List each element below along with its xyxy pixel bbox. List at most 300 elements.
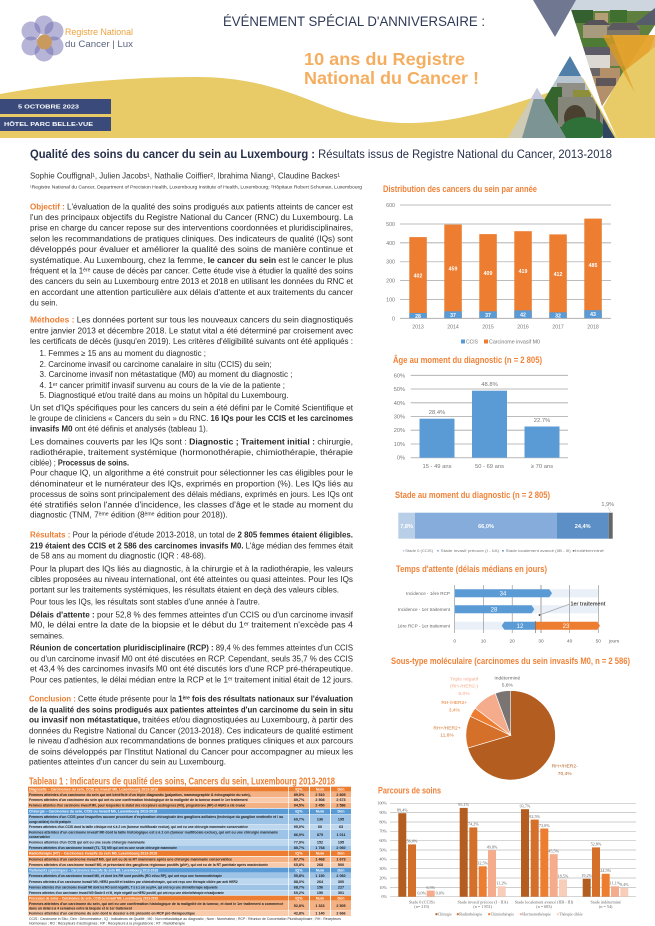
chart: distribution par année: 100 [386, 297, 395, 303]
pie labels: 9,0% [458, 691, 470, 697]
section: processus de soins: Num [316, 896, 325, 900]
section: processus de soins: 42,8% [294, 912, 305, 916]
results text: Délais d'attente : pour 52,8 % des femmes atteintes d'un CCIS ou d'un carcinome invasif [30, 611, 354, 620]
results text: Pour ces patientes, le délai médian entre la RCP et le 1 [30, 676, 226, 685]
table footnote [29, 916, 341, 925]
chart: distribution par année: 32 [555, 314, 561, 320]
chart: âge au diagnostic: 50 - 69 ans [475, 464, 504, 470]
gold triangle [602, 35, 655, 93]
section: chirurgie: Num [316, 810, 325, 814]
group labels: (n = 1 851) [473, 904, 493, 909]
chart: âge au diagnostic: 10% [394, 442, 405, 448]
group labels: Stade invasif précoce (I - IIA) [458, 899, 508, 904]
chart: âge au diagnostic: 60% [394, 373, 405, 379]
group: stade invasif précoce: 11,2% [496, 880, 508, 886]
poster title: Qualité des soins du cancer du sein au Luxembourg : Résultats issus de Registre National du Cancer, 2013-2018 [30, 148, 612, 161]
methods text [30, 316, 354, 520]
section: chirurgie [28, 809, 351, 850]
chart: distribution par année: 2017 [552, 325, 564, 331]
duration bars [455, 589, 600, 633]
section: traitements systémiques: 227 [338, 886, 344, 890]
chart: parcours de soins: 0% [381, 894, 388, 899]
section: processus de soins: 2 666 [336, 912, 346, 916]
event title [304, 49, 479, 88]
section: chirurgie: Femmes atteintes d'un CCIS pour lesquelles aucune procédure d'exploration chirurgicale des ganglions axillaires (technique du ganglion sentinelle et / ou [29, 815, 284, 819]
section: traitements systémiques: 60,2% [294, 891, 305, 895]
axis labels: 40 [567, 638, 573, 644]
section: traitements systémiques: 150 [317, 891, 323, 895]
section: traitements systémiques: 88,0% [294, 880, 305, 884]
group: stade invasif précoce: 95,1% [458, 802, 470, 808]
duration bars: 23 [563, 624, 570, 630]
eligibility list: 2. Carcinome invasif ou carcinome canalaire in situ (CCIS) du sein; [40, 360, 272, 369]
photo triangle: bridge [544, 56, 615, 138]
section: processus de soins: Dén [338, 896, 345, 900]
chart: âge au diagnostic: ≥ 70 ans [531, 464, 553, 470]
results text: portant sur les traitements systémiques, les résultats étaient en deçà des valeurs cibles. [30, 586, 339, 595]
section: processus de soins [28, 896, 351, 916]
chart title: Parcours de soins [378, 784, 441, 795]
group labels [409, 899, 621, 909]
authors: Sophie Couffignal¹, Julien Jacobs¹, Nathalie Coiffier², Ibrahima Niang¹, Claudine Backes¹ [30, 172, 340, 181]
callout 1,9% [601, 502, 614, 512]
section: traitements systémiques: IQ% [295, 868, 303, 872]
conclusion text: de la qualité des soins prodigués aux patientes atteintes d'un carcinome du sein in situ [29, 706, 353, 715]
group: stade localement avancé [520, 804, 569, 897]
pie labels: 5,6% [502, 683, 514, 689]
section: chirurgie: conservatrice [29, 835, 50, 839]
group labels: Stade 0 (CCIS) [409, 899, 435, 904]
results text: Pour la plupart des IQs liés au diagnostic, à la chirurgie et à la radiothérapie, les valeurs [30, 565, 353, 574]
chart: âge au diagnostic: 15 - 49 ans [422, 464, 452, 470]
objective text: l'un des principaux objectifs du Registre National du Cancer (RNC) du Luxembourg. La [30, 213, 354, 222]
legend: CCIS [466, 340, 479, 346]
chart: distribution par année: 2014 [447, 325, 459, 331]
group labels: (n = 54) [599, 904, 613, 909]
objective text: selon les recommandations de pratiques cliniques. Des indicateurs de qualité (IQs) sont [30, 234, 354, 243]
section: diagnostic: Num [316, 788, 325, 792]
results text: Réunion de concertation pluridisciplinaire (RCP) : 89,4 % des femmes atteintes d'un CCIS [30, 644, 353, 653]
pie labels: 11,6% [440, 733, 454, 739]
section: radiothérapie: 500 [338, 863, 344, 867]
stacked bars [409, 219, 602, 318]
results text: traitement n'excède pas 4 [249, 621, 354, 630]
section: traitements systémiques: Femmes atteintes d'un carcinome invasif M0, HER2 positif et traitées par chimiothérapie, qui ont reçu une thérapie ciblée par anti HER2 [29, 880, 238, 884]
methods text: ème [145, 512, 155, 518]
section: radiothérapie: 1 468 [315, 858, 325, 862]
section: processus de soins: Femmes atteintes d'un carcinome du sein dont le dossier a été présenté en RCP pré-thérapeutique [29, 912, 195, 916]
chart: âge au diagnostic: 0% [397, 456, 405, 462]
eligibility list: 5. Diagnostiqué et/ou traité dans au moins un hôpital du Luxembourg. [40, 391, 288, 400]
section: traitements systémiques: Femmes atteintes d'un carcinome invasif M0 Stade II et III, triple négatif ou HER2 positif, qui ont reçu une chimiothérapie néoadjuvante [29, 891, 224, 895]
group: stade invasif précoce: 49,8% [487, 844, 498, 850]
objective text: en accordant une attention particulière aux délais d'attente et aux traitements du cancer [30, 288, 353, 297]
legend: Stade invasif précoce (I - IIA) [441, 549, 500, 553]
chart title: Stade au moment du diagnostic (n = 2 805) [395, 489, 550, 500]
axis labels [453, 638, 620, 644]
section: radiothérapie: Radiothérapie (RT) – Carcinomes invasifs du sein M0, Luxembourg 2013-2018 [29, 852, 157, 856]
methods text: entre janvier 2013 et décembre 2018. Le statut vital a été déterminé par croisement avec [30, 326, 353, 335]
section: chirurgie: 63 [339, 825, 343, 829]
section: chirurgie: IQ% [295, 810, 303, 814]
section: radiothérapie: 1 673 [336, 858, 346, 862]
section: chirurgie: 1 768 [315, 846, 325, 850]
section: chirurgie: Dén [338, 810, 345, 814]
section: diagnostic: 2 508 [315, 798, 325, 802]
chart title: Temps d'attente (délais médians en jours) [396, 563, 547, 574]
section: chirurgie: 1 011 [336, 833, 346, 837]
eligibility list: cancer primitif invasif survenu au cours de la vie de la patiente ; [57, 381, 285, 390]
chart: distribution par année: 2016 [517, 325, 529, 331]
legend [403, 549, 604, 553]
results text: de 58 ans au moment du diagnostic (IQR : 48-68). [30, 552, 206, 561]
results text: M0, le délai entre la date de la biopsie et le début du 1 [30, 621, 222, 630]
section: traitements systémiques: Traitements systémiques – Carcinomes invasifs du sein M0, Luxembourg 2013-2018 [29, 868, 158, 872]
objective text: cause de décès par cancer. Cette étude vise à étudier la qualité des soins [90, 266, 353, 276]
legend: Chirurgie [438, 912, 452, 917]
date box [0, 99, 111, 114]
row labels: Incidence - 1er traitement [398, 607, 451, 612]
chart: âge au diagnostic: 30% [394, 414, 405, 420]
duration bars: 28 [491, 607, 498, 613]
chart: parcours de soins: 80% [379, 819, 388, 824]
chart: distribution par année: 37 [450, 313, 456, 319]
section: traitements systémiques: 264 [317, 880, 324, 884]
methods text: Pour chaque IQ, un algorithme a été construit pour sélectionner les cas éligibles pour le [30, 469, 354, 478]
section: chirurgie: 152 [317, 841, 323, 845]
methods text: dénominateur et le numérateur des IQs, exprimés en proportion (%). Les IQs liés au [30, 480, 353, 489]
section: radiothérapie: Dén [338, 852, 345, 856]
tan and gray-green triangle [508, 88, 566, 138]
chart: distribution par année: 300 [386, 260, 395, 266]
chart: distribution par année: 0 [392, 316, 395, 322]
chart: âge au diagnostic: 22.7% [534, 418, 550, 424]
group: stade localement avancé: 93,7% [520, 804, 531, 810]
chart: âge au diagnostic: 48.8% [481, 382, 498, 388]
section: processus de soins: 52,8% [294, 904, 305, 908]
table footnote: CCIS : Carcinome in Situ ; Dén : Dénominateur ; IQ : Indicateurs de Qualité ; M0 : Non métastatique au diagnostic ; Num : Numérateur ; RCP : Réunion de Concertation Pluridisciplinaire ; RH : Récepteurs [29, 916, 341, 921]
methods text: édition pour 2018)). [154, 511, 228, 520]
group: stade localement avancé: 45,5% [548, 848, 560, 854]
eligibility list: 1. Femmes ≥ 15 ans au moment du diagnostic ; [40, 349, 206, 358]
section: traitements systémiques: Femmes atteintes d'un carcinome invasif M0, et dont les RH sont positifs (RO et/ou RP), qui ont reçu une hormonothérapie [29, 874, 222, 878]
legend: Carcinome invasif M0 [489, 340, 540, 346]
legend: Stade localement avancé (IIB - III) [506, 549, 572, 553]
section: chirurgie: Chirurgie – Carcinomes du sein, CCIS ou invasif M0, Luxembourg 2013-2018 [29, 810, 157, 814]
legend [436, 912, 583, 917]
group: stade localement avancé: 82,5% [529, 814, 541, 820]
methods text: Méthodes : Les données portent sur tous les nouveaux cancers du sein diagnostiqués [30, 316, 353, 325]
section: radiothérapie: IQ% [295, 852, 303, 856]
venue box: HÔTEL PARC BELLE-VUE [4, 120, 93, 128]
affiliations: ¹Registre National du Cancer, Department of Precision Health, Luxembourg Institute of Health, Luxembourg; ²Hôpitaux Robert Schuman, Luxembourg [30, 184, 363, 190]
chart: parcours de soins: 100% [377, 801, 388, 806]
results text: ou d'un carcinome invasif M0 ont été discutées en RCP. Cependant, seuls 35,7 % des CCIS [30, 655, 353, 664]
group labels: (n= 219) [414, 904, 430, 909]
section: processus de soins: IQ% [295, 896, 303, 900]
section: chirurgie: 2 060 [336, 846, 346, 850]
chart: distribution par année: 28 [415, 314, 421, 320]
objective text: Objectif : L'évaluation de la qualité des soins prodigués aux patients atteints de cancer est [30, 202, 354, 211]
chart: distribution par année: 43 [590, 312, 596, 318]
photo triangle: old town [570, 0, 655, 106]
methods text: invasifs M0 ont été définis et analysés (tableau 1). [30, 425, 208, 434]
section: chirurgie: curage axillaire) n'a été pratiquée [29, 820, 71, 824]
section: diagnostic: 2 673 [336, 798, 346, 802]
methods text: ème [99, 512, 109, 518]
legend: Stade 0 (CCIS) [405, 549, 434, 553]
axis labels: 30 [538, 638, 544, 644]
pie labels: RH+/HER2- [552, 764, 578, 770]
conclusion text: données du Registre National du Cancer (2013-2018). Ces indicateurs de qualité estiment [29, 727, 354, 736]
methods text: les certificats de décès (jusqu'en 2019). Les critères d'éligibilité suivants ont été appliqués : [30, 337, 353, 346]
eligibility list: er [53, 382, 58, 388]
row labels: Incidence - 1ère RCP [406, 591, 450, 596]
group: stade indéterminé: 52,8% [591, 842, 602, 848]
section: traitements systémiques: 300 [338, 880, 344, 884]
chart: distribution par année [383, 183, 611, 346]
group labels: (n = 683) [536, 904, 552, 909]
chart: distribution par année: 2018 [587, 325, 599, 331]
chart: distribution par année: 500 [386, 222, 395, 228]
legend [461, 340, 540, 346]
yellow wave [0, 77, 617, 138]
group: stade 0 [397, 808, 445, 897]
gray triangle [533, 0, 576, 37]
conclusion text: ou invasif non métastatique, traitées et/ou diagnostiquées au Luxembourg, à partir des [29, 716, 353, 725]
objective text: ère [83, 268, 91, 274]
chart: parcours de soins: 50% [379, 847, 388, 852]
group: stade 0: 6,5% [426, 885, 436, 891]
objective text: fréquent et la 1 [30, 266, 83, 276]
section: diagnostic: Diagnostic – Carcinomes du sein, CCIS ou invasif M0, Luxembourg 2013-2018 [29, 788, 158, 792]
section: traitements systémiques: 1 150 [315, 874, 325, 878]
section: traitements systémiques: 55,8% [294, 874, 305, 878]
objective text: prise en charge du cancer repose sur des interventions coordonnées et pluridisciplinaires, [30, 224, 353, 233]
chart: distribution par année: 459 [449, 267, 457, 273]
conclusion text [29, 695, 354, 767]
section: radiothérapie [28, 851, 351, 867]
results text: 219 étaient des CCIS et 2 586 des carcinomes invasifs M0. L'âge médian des femmes était [30, 542, 354, 551]
stacked bar: 24,4% [575, 524, 591, 530]
conclusion text: patientes atteintes d'un cancer du sein au Luxembourg. [29, 758, 226, 767]
results text: semaines. [30, 632, 64, 641]
section: processus de soins: 1 140 [315, 912, 325, 916]
objective text [30, 202, 354, 308]
methods text: radiothérapie, traitement systémique (hormonothérapie, chimiothérapie, thérapie [30, 448, 354, 457]
section: chirurgie: 875 [317, 833, 323, 837]
eligibility list: 4. 1 [40, 381, 53, 390]
section: chirurgie: 95,0% [294, 825, 305, 829]
callout: 1er traitement [539, 601, 606, 616]
chart title: Âge au moment du diagnostic (n = 2 805) [393, 354, 542, 365]
section: chirurgie: 69,7% [294, 818, 305, 822]
row labels: 1ère RCP - 1er traitement [397, 623, 451, 628]
section: diagnostic: 89,7% [294, 798, 305, 802]
chart: temps d'attente [396, 563, 620, 644]
event heading: ÉVÉNEMENT SPÉCIAL D'ANNIVERSAIRE : [223, 13, 485, 29]
section: diagnostic: 2 450 [315, 804, 325, 808]
chart: parcours de soins: 10% [379, 885, 388, 890]
logo: du Cancer | Lux [65, 39, 133, 50]
section: radiothérapie: 65,8% [294, 863, 305, 867]
section: radiothérapie: Num [316, 852, 325, 856]
row labels [397, 591, 451, 628]
date box: 5 OCTOBRE 2023 [18, 105, 80, 111]
legend: Radiothérapie [459, 912, 482, 917]
section: diagnostic: 2 586 [336, 804, 346, 808]
event title: 10 ans du Registre [304, 49, 465, 69]
pie labels: 70,4% [558, 771, 572, 777]
section: radiothérapie: 268 [317, 863, 323, 867]
results text: Résultats : Pour la période d'étude 2013-2018, un total de 2 805 femmes étaient éligibles. [30, 531, 353, 540]
duration bars: 34 [500, 591, 507, 597]
methods text: ciblée) ; Processus de soins. [30, 459, 129, 468]
conclusion text: de soins développés par l'Institut National du Cancer pour accompagner au mieux les [29, 748, 353, 757]
header banner [0, 0, 655, 143]
chart: distribution par année: 412 [554, 272, 562, 278]
chart: parcours de soins: 40% [379, 857, 388, 862]
group: stade localement avancé: 18,5% [558, 874, 569, 880]
section: traitements systémiques: Femmes atteintes d'un carcinome invasif M0 dont les RO sont négatifs, T ≥ à 1 cm ou pN+, qui ont reçu une chimiothérapie adjuvante [29, 886, 218, 890]
objective text: développés pour évaluer et améliorer la qualité des soins de manière continue et [30, 245, 354, 254]
pie labels: RH+/HER2+ [433, 725, 461, 731]
logo [22, 16, 133, 62]
chart: parcours de soins: 60% [379, 838, 388, 843]
conclusion text: Conclusion : Cette étude présente pour la 1 [29, 695, 183, 704]
pie labels [433, 675, 578, 777]
methods text: Un set d'IQs spécifiques pour les cancers du sein a été défini par le Comité Scientifique et [30, 404, 354, 413]
chart: âge au diagnostic: 28.4% [429, 410, 445, 416]
methods text: édition (8 [109, 511, 145, 520]
pie labels: Indéterminé [494, 675, 520, 681]
chart: âge au diagnostic: 40% [394, 401, 405, 407]
section: diagnostic: Dén [338, 788, 345, 792]
group: stade invasif précoce [458, 802, 508, 897]
objective text: du sein. [30, 299, 58, 308]
chart: distribution par année: 419 [519, 269, 527, 275]
axis labels: 50 [596, 638, 601, 644]
section: chirurgie: Femmes atteintes d'un carcinome invasif M0 dont la taille histologique est ≤ à 2 cm (tumeur multifocale exclue), qui ont eu une chirurgie mammaire [29, 831, 278, 835]
methods text: le groupe de cliniciens « Cancers du sein » du RNC. 16 IQs pour les CCIS et les carcinomes [30, 414, 354, 423]
results text: traitement initial était de 12 jours. [232, 676, 353, 685]
section: diagnostic: Femmes atteintes d'un carcinome du sein qui ont eu une confirmation histologique de la malignité de la tumeur avant le 1er traitement [29, 798, 248, 802]
chart: parcours de soins: 70% [379, 829, 388, 834]
results text: er [244, 622, 249, 628]
pie [466, 691, 555, 780]
section: processus de soins: dans un délai ≤ à 4 semaines entre la biopsie et le 1er traitement [29, 906, 133, 910]
conclusion text: fois des résultats nationaux sur l'évaluation [190, 695, 353, 704]
stacked bar: 66,0% [478, 524, 494, 530]
chart: distribution par année: 600 [386, 203, 395, 209]
pie labels: (RH-/HER2-) [450, 684, 478, 690]
eligibility list [40, 349, 292, 400]
chart title: Distribution des cancers du sein par année [383, 183, 537, 194]
legend: Hormonothérapie [522, 912, 551, 917]
chart: distribution par année: 402 [414, 274, 422, 280]
chart: âge au diagnostic: 50% [394, 387, 405, 393]
logo: Registre National [65, 27, 133, 38]
callout: 1er traitement: 1er traitement [570, 601, 606, 607]
section: traitements systémiques [28, 868, 351, 895]
chart: stade au diagnostic [395, 489, 614, 553]
legend: Thérapie ciblée [559, 912, 583, 917]
results text [30, 531, 354, 685]
stacked bar [398, 513, 613, 539]
chart: distribution par année: 42 [520, 312, 526, 318]
section: diagnostic: Femmes atteintes d'un carcinome du sein qui ont bénéficié d'un triple diagnostic (palpation, mammographie & échographie du sein), [29, 793, 251, 797]
group: stade 0: 0,0% [436, 890, 445, 896]
chart: distribution par année: 409 [484, 271, 492, 277]
chart: âge au diagnostic [393, 354, 568, 470]
conclusion text: ère [183, 696, 190, 702]
section: chirurgie: Femmes atteintes d'un CCIS qui ont eu une seule chirurgie mammaire [29, 841, 145, 845]
group: stade invasif précoce: 74,2% [468, 822, 479, 828]
section: diagnostic [28, 787, 351, 808]
legend: Chimiothérapie [491, 912, 514, 917]
section: processus de soins: 2 505 [336, 904, 346, 908]
group: stade localement avancé: 73,0% [539, 823, 550, 829]
venue box [0, 117, 111, 131]
group: stade invasif précoce: 32,5% [477, 861, 489, 867]
results text: et 43,4 % des carcinomes invasifs M0 ont été discutés lors d'une RCP pré-thérapeutique. [30, 665, 353, 674]
group: stade indéterminé: 11,1% [610, 881, 621, 887]
table 1 [28, 777, 351, 925]
section: chirurgie: Femmes atteintes d'un carcinome invasif (T1, T2) M0 qui ont eu une seule chirurgie mammaire [29, 846, 177, 850]
section: chirurgie: 77,9% [294, 841, 305, 845]
section: traitements systémiques: 301 [338, 891, 344, 895]
chart: âge au diagnostic: 20% [394, 428, 405, 434]
section: chirurgie: 85,7% [294, 846, 305, 850]
chart: parcours de soins: 90% [379, 810, 388, 815]
section: traitements systémiques: 156 [317, 886, 323, 890]
methods text: été stratifiés selon l'année d'incidence, les classes d'âge et le stade au moment du [30, 501, 353, 510]
objective text: des cancers du sein au Luxembourg entre 2013 et 2018 en utilisant les données du RNC et [30, 277, 354, 286]
axis labels: 0 [453, 638, 456, 644]
pie labels: Triple négatif [450, 676, 479, 682]
section: traitements systémiques: Dén [338, 868, 345, 872]
axis labels: 20 [510, 638, 515, 644]
pie labels: 3,4% [449, 707, 461, 713]
section: diagnostic: 89,5% [294, 793, 305, 797]
pie labels: RH-/HER2+ [441, 700, 467, 706]
legend: Indéterminé [575, 549, 604, 553]
methods text: Les domaines couverts par les IQs sont : Diagnostic ; Traitement initial : chirurgie, [30, 438, 353, 447]
section: diagnostic: 2 805 [336, 793, 346, 797]
section: traitements systémiques: 2 060 [336, 874, 346, 878]
objective text: systématique. Au Luxembourg, chez la femme, le cancer du sein est le cancer le plus [30, 256, 353, 265]
chart: sous-type moléculaire [391, 655, 630, 780]
section: diagnostic: 94,5% [294, 804, 305, 808]
chart: parcours de soins: 30% [379, 866, 388, 871]
section: processus de soins: 1 323 [315, 904, 325, 908]
section: chirurgie: 60 [318, 825, 322, 829]
stacked bar: 7,8% [400, 524, 413, 530]
chart: distribution par année: 37 [485, 313, 491, 319]
age bars [420, 391, 560, 458]
axis labels: 10 [481, 638, 486, 644]
section: diagnostic: Femmes atteintes d'un carcinome invasif M0, pour lesquelles le statut des récepteurs œstrogènes (RO), progestérone (RP) et HER2 a été évalué [29, 804, 245, 808]
event title: National du Cancer ! [304, 68, 479, 88]
table footnote: Hormonaux ; RO : Récepteurs d'œstrogènes ; RP : Récepteurs à la progestérone ; RT : Radiothérapie [29, 920, 185, 925]
group labels: Stade localement avancé (IIB - III) [515, 899, 574, 904]
section: radiothérapie: Femmes atteintes d'un carcinome invasif M0, et présentant des ganglions régionaux positifs (pN+), qui ont eu de la RT pariétale après mastectomie [29, 863, 268, 867]
chart: distribution par année: 200 [386, 278, 395, 284]
chart: distribution par année: 2015 [482, 325, 494, 331]
section: radiothérapie: 87,7% [294, 858, 305, 862]
results text: cibles proposées au niveau international, ont été atteintes ou quasi atteintes. Pour les IQs [30, 575, 353, 584]
group: stade indéterminé [581, 842, 629, 897]
